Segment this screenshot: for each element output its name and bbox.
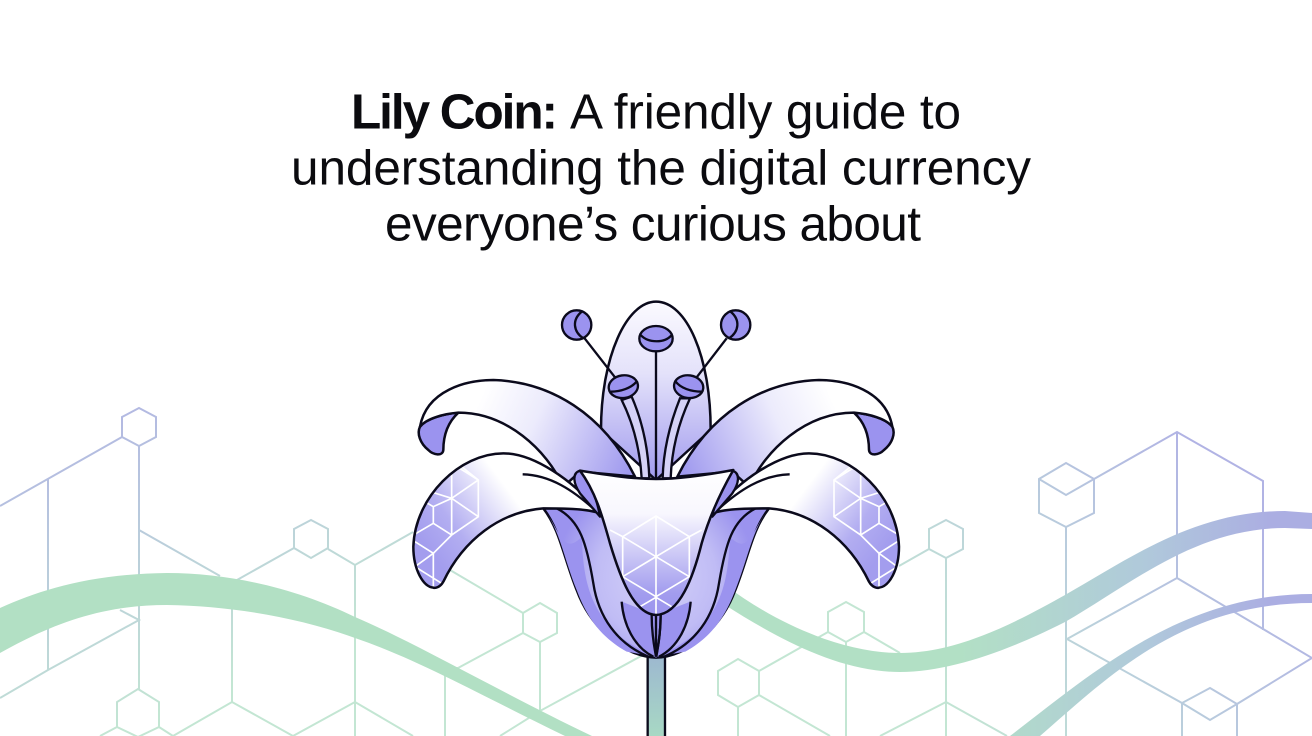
back central petal — [601, 302, 711, 480]
lily flower illustration — [413, 302, 899, 736]
title: understanding the digital currency — [291, 140, 1031, 196]
title — [291, 84, 1031, 252]
title: everyone’s curious about — [385, 196, 921, 252]
gradient ribbon: lower right — [1010, 594, 1312, 736]
green ribbon: left — [0, 573, 592, 736]
background network lines: right — [718, 432, 1312, 736]
stamens — [562, 310, 750, 478]
background network lines: left — [0, 408, 643, 736]
flower cup — [543, 508, 769, 658]
gradient ribbon: upper right — [725, 511, 1312, 672]
left petals — [413, 380, 635, 588]
stem — [648, 655, 665, 736]
front petal with hexagon pattern — [580, 470, 733, 615]
title: A friendly guide to — [570, 84, 961, 140]
title: Lily Coin: — [351, 84, 558, 140]
right petals — [677, 380, 899, 588]
